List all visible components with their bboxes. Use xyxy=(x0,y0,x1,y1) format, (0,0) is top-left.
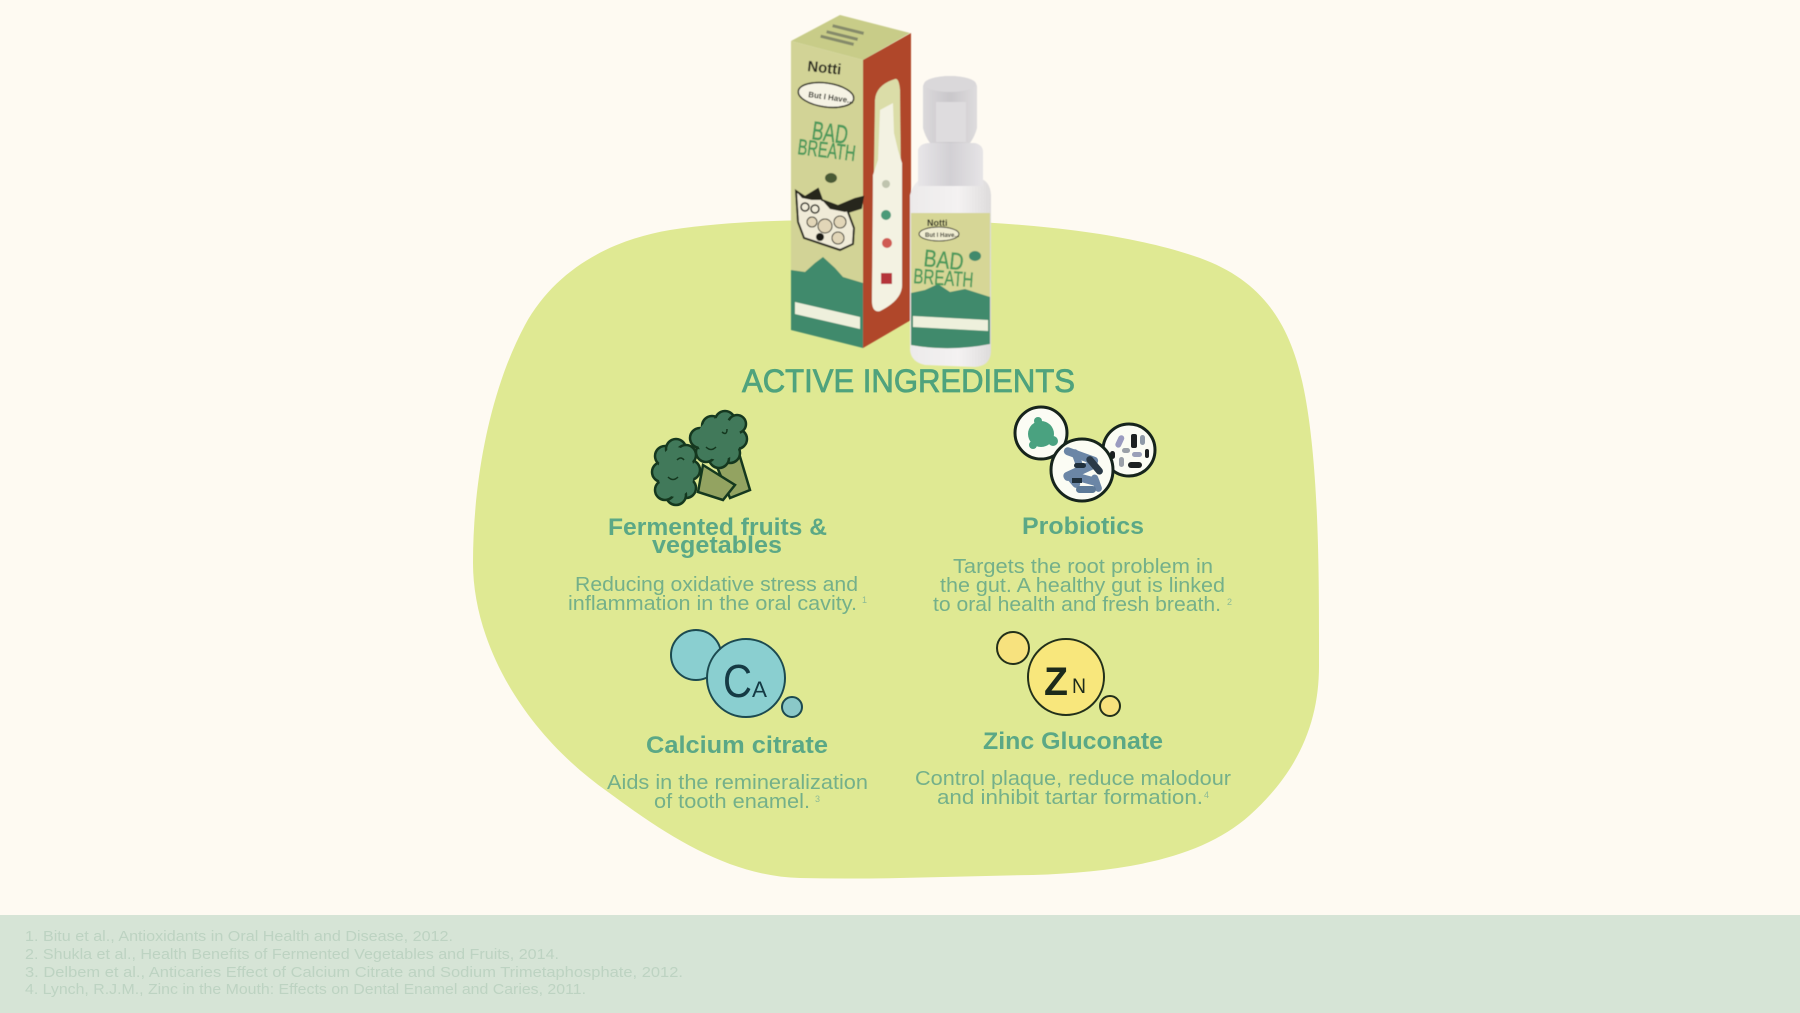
green blob panel xyxy=(473,220,1319,879)
bottle title: BAD xyxy=(922,245,965,276)
product: box and bottle xyxy=(791,15,991,367)
heading: Probiotics xyxy=(1022,513,1144,540)
bottle label xyxy=(911,213,990,348)
bottle neck xyxy=(918,143,983,186)
description: and inhibit tartar formation. xyxy=(937,787,1203,809)
heading: Zinc Gluconate xyxy=(983,728,1163,755)
box brand: Notti xyxy=(807,58,842,79)
icon: microbes xyxy=(1015,407,1155,501)
reference 2: 2. Shukla et al., Health Benefits of Fermented Vegetables and Fruits, 2014. xyxy=(25,946,559,963)
bottle body xyxy=(910,178,991,367)
ingredient: fermented fruits and vegetables xyxy=(568,411,867,615)
icon: calcium bubbles: C xyxy=(723,655,752,707)
bottle title: BREATH xyxy=(913,265,974,292)
box top xyxy=(791,15,910,60)
bottle strip label xyxy=(913,316,988,331)
bottle cap xyxy=(923,76,977,143)
box cat illustration xyxy=(796,189,863,250)
box oval label xyxy=(797,79,855,111)
description: Targets the root problem in xyxy=(953,556,1213,578)
nozzle xyxy=(936,102,966,142)
box strip label xyxy=(795,302,860,329)
box oval label: But I Have... xyxy=(808,90,854,105)
reference 4: 4. Lynch, R.J.M., Zinc in the Mouth: Effects on Dental Enamel and Caries, 2011. xyxy=(25,981,586,998)
icon: zinc bubbles: Z xyxy=(1044,660,1068,704)
ingredient: probiotics xyxy=(933,407,1232,616)
bottle green band xyxy=(911,284,990,348)
box title: BAD xyxy=(810,115,850,150)
box side window xyxy=(872,79,902,311)
icon: zinc bubbles xyxy=(997,632,1120,716)
description: of tooth enamel. xyxy=(654,791,810,813)
box title: BREATH xyxy=(796,134,857,166)
reference 3: 3. Delbem et al., Anticaries Effect of Calcium Citrate and Sodium Trimetaphosphate, 2012. xyxy=(25,964,683,981)
description: 3 xyxy=(815,794,820,804)
description: Reducing oxidative stress and xyxy=(575,574,858,596)
box front green band xyxy=(791,257,863,348)
description xyxy=(607,772,868,813)
small leaf icon xyxy=(825,173,837,183)
icon: zinc bubbles: N xyxy=(1072,675,1086,698)
description: Aids in the remineralization xyxy=(607,772,868,794)
description: to oral health and fresh breath. xyxy=(933,594,1221,616)
title: ACTIVE INGREDIENTS xyxy=(742,363,1075,399)
description: 4 xyxy=(1204,790,1209,800)
side icons xyxy=(881,180,892,284)
icon: broccoli xyxy=(652,411,750,505)
heading: Fermented fruits & xyxy=(608,514,827,541)
box top print xyxy=(820,24,864,46)
heading: Calcium citrate xyxy=(646,732,828,759)
icon: calcium bubbles: A xyxy=(752,677,767,702)
description: the gut. A healthy gut is linked xyxy=(940,575,1225,597)
description xyxy=(933,556,1232,616)
description: inflammation in the oral cavity. xyxy=(568,593,857,615)
description: 2 xyxy=(1227,597,1232,607)
ingredient: zinc gluconate xyxy=(915,632,1231,809)
description: Control plaque, reduce malodour xyxy=(915,768,1231,790)
box title xyxy=(796,115,857,166)
bottle oval label xyxy=(919,227,960,241)
side window bottle shape xyxy=(872,103,902,311)
box front xyxy=(791,41,863,348)
icon: calcium bubbles xyxy=(671,630,802,717)
description xyxy=(568,574,867,615)
bottle oval label: But I Have... xyxy=(925,233,960,239)
bottle brand: Notti xyxy=(927,218,948,228)
description: 1 xyxy=(862,595,867,605)
cap top xyxy=(924,76,976,92)
ingredient: fermented fruits and vegetables: vegetables xyxy=(652,532,782,559)
bottle title xyxy=(913,245,974,292)
footer references xyxy=(0,915,1800,1013)
description xyxy=(915,768,1231,809)
ingredient: calcium citrate xyxy=(607,630,868,813)
reference 1: 1. Bitu et al., Antioxidants in Oral Health and Disease, 2012. xyxy=(25,928,453,945)
small leaf on bottle xyxy=(969,251,981,261)
box side xyxy=(863,33,911,348)
